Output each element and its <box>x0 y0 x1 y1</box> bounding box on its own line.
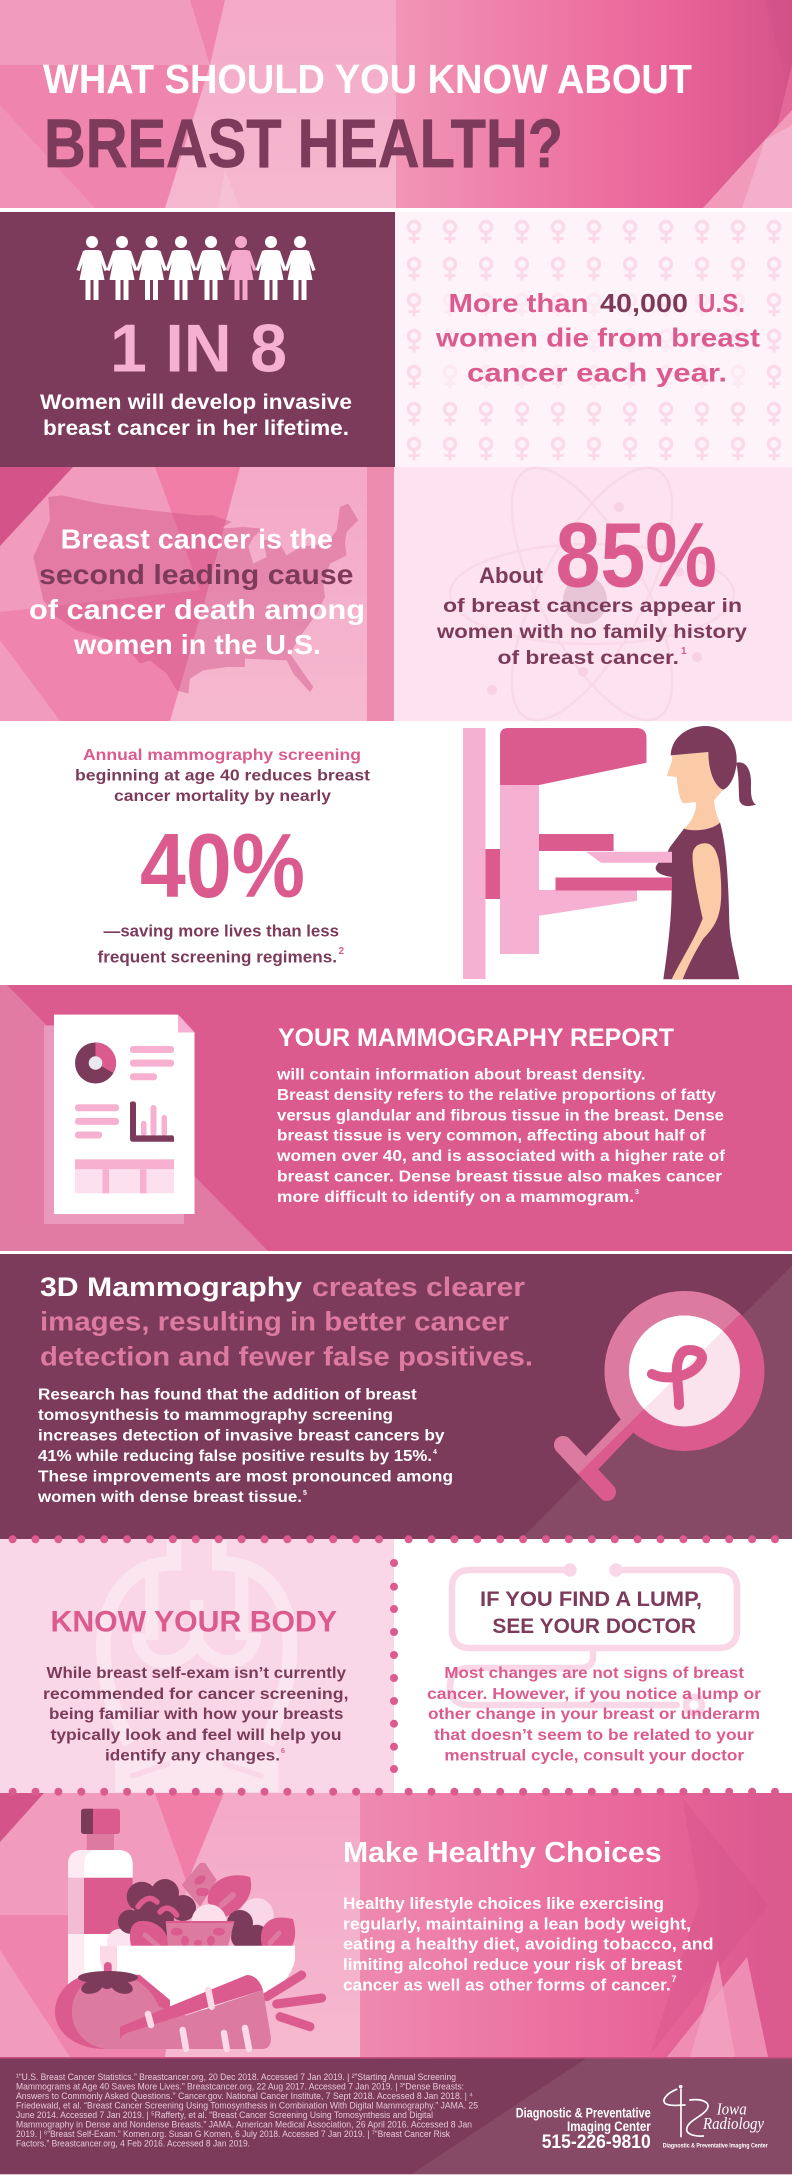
text block: that doesn’t seem to be related to your <box>434 1727 754 1744</box>
heading: Make Healthy Choices <box>343 1837 662 1869</box>
icon: ribbon <box>652 1350 702 1405</box>
panel: make healthy choices <box>0 1793 792 2057</box>
text block: menstrual cycle, consult your doctor <box>444 1748 744 1765</box>
text block <box>43 1665 348 1765</box>
text block: Healthy lifestyle choices like exercising <box>343 1894 664 1913</box>
text block: versus glandular and fibrous tissue in the breast. Dense <box>277 1107 724 1124</box>
logo: Iowa Radiology: Radiology <box>702 2114 764 2133</box>
text block: will contain information about breast density. <box>276 1066 646 1083</box>
logo: Iowa Radiology: Diagnostic & Preventative Imaging Center <box>663 2143 768 2150</box>
heading: IF YOU FIND A LUMP, <box>480 1587 702 1611</box>
text block: eating a healthy diet, avoiding tobacco, and <box>343 1935 714 1954</box>
text block: intro <box>75 747 371 805</box>
text block: While breast self-exam isn’t currently <box>46 1665 346 1682</box>
text block: 1 <box>681 646 687 657</box>
panel: 85 percent <box>394 446 792 742</box>
text block: Research has found that the addition of breast <box>38 1387 417 1404</box>
heading: SEE YOUR DOCTOR <box>492 1614 696 1638</box>
text block: being familiar with how your breasts <box>49 1706 343 1723</box>
text block: of breast cancers appear in <box>443 596 742 617</box>
illustration: woman <box>556 726 756 979</box>
text block: 40,000 <box>600 288 688 318</box>
text block: More than <box>448 288 588 318</box>
text block: Most changes are not signs of breast <box>444 1665 745 1682</box>
icon: tomato <box>55 1962 200 2049</box>
text block: references: Factors.” Breastcancer.org, 4 Feb 2016. Accessed 8 Jan 2019. <box>16 2139 250 2150</box>
text block: cancer each year. <box>467 358 727 388</box>
panel: 3D mammography <box>0 1254 792 1539</box>
icon: bowl <box>100 1946 295 2010</box>
text block: 7 <box>672 1974 677 1984</box>
text block: About <box>479 563 544 588</box>
text block: breast cancer in her lifetime. <box>43 417 349 440</box>
text block: 3 <box>635 1189 639 1196</box>
illustration: mammography machine <box>463 728 646 979</box>
text block <box>435 288 760 388</box>
panel: know your body <box>0 1539 394 1793</box>
text block: women with dense breast tissue. <box>37 1489 302 1506</box>
text block: women over 40, and is associated with a higher rate of <box>276 1148 726 1165</box>
heading: images, resulting in better cancer <box>40 1307 510 1337</box>
panel: footer <box>0 2057 792 2175</box>
decoration: dotted borders <box>9 1535 779 1796</box>
text block <box>29 524 365 660</box>
text block: outro: —saving more lives than less <box>104 923 339 941</box>
icon: broccoli <box>118 1879 269 1949</box>
text block: second leading cause <box>39 559 354 590</box>
text block: recommended for cancer screening, <box>43 1686 348 1703</box>
icon: bottle <box>68 1809 133 2000</box>
text block: Breast cancer is the <box>61 524 333 555</box>
contact block <box>516 2106 651 2153</box>
text block: typically look and feel will help you <box>50 1727 342 1744</box>
text block: tomosynthesis to mammography screening <box>38 1407 393 1424</box>
icon: atom watermark <box>450 446 734 742</box>
panel: 40,000 women <box>395 212 792 467</box>
text block: women with no family history <box>436 622 748 643</box>
text block <box>427 1665 761 1765</box>
text block: outro: frequent screening regimens. <box>98 949 337 967</box>
text block: increases detection of invasive breast cancers by <box>38 1428 445 1445</box>
icon: carrot <box>103 1975 322 2049</box>
pattern: venus symbols <box>408 221 780 460</box>
text block: limiting alcohol reduce your risk of breast <box>343 1955 682 1974</box>
text block: These improvements are most pronounced among <box>38 1468 453 1485</box>
text block: other change in your breast or underarm <box>428 1706 760 1723</box>
icon: venus symbol with ribbon <box>563 1291 764 1492</box>
icon: torso watermark <box>103 1540 290 1792</box>
text block <box>276 1066 726 1206</box>
text block: intro: Annual mammography screening <box>83 747 361 764</box>
text block: outro <box>98 923 344 967</box>
logo: Iowa Radiology: Iowa <box>716 2099 747 2118</box>
text block: references: Answers to Commonly Asked Questions.” Cancer.gov. National Cancer Institute, 7 Sept 2018. Accessed 8 Jan 2018. | ⁴ <box>16 2091 473 2102</box>
text block: of cancer death among <box>29 594 365 625</box>
panel: annual screening <box>75 726 756 979</box>
logo: Iowa Radiology <box>663 2086 768 2150</box>
text block: of breast cancer. <box>498 648 679 669</box>
statistic: 85%: 85% <box>556 505 717 607</box>
contact block: Imaging Center <box>567 2119 651 2134</box>
contact block: 515-226-9810 <box>542 2132 651 2153</box>
heading: creates clearer <box>312 1272 526 1302</box>
text block <box>37 1387 453 1506</box>
text block: outro: 2 <box>338 946 344 957</box>
text block: 5 <box>303 1490 307 1497</box>
text block: identify any changes. <box>105 1748 280 1765</box>
text block: references: 2019. | ⁶“Breast Self-Exam.” Komen.org. Susan G Komen, 6 July 2018. Accessed 7 Jan 2019. | ⁷“Breast Cancer Risk <box>16 2129 450 2140</box>
text block: women die from breast <box>435 323 760 353</box>
contact block: Diagnostic & Preventative <box>516 2106 651 2121</box>
title line 1: WHAT SHOULD YOU KNOW ABOUT <box>43 56 692 102</box>
heading: detection and fewer false positives. <box>40 1342 533 1372</box>
text block: 6 <box>281 1748 285 1755</box>
statistic: 1 in 8: 1 IN 8 <box>110 310 287 386</box>
icon: report document <box>44 1015 194 1224</box>
text block: intro: cancer mortality by nearly <box>114 788 331 805</box>
panel: 1 in 8 <box>0 212 395 467</box>
map: United States <box>33 495 358 694</box>
text block: more difficult to identify on a mammogram. <box>277 1189 634 1206</box>
icon: stethoscope speech bubble <box>450 1566 737 1713</box>
text block <box>436 563 748 669</box>
heading: KNOW YOUR BODY <box>50 1606 337 1639</box>
text block: references: Friedewald, et al. “Breast Cancer Screening Using Tomosynthesis in Combination With Digital Mammography.” JAMA. 25 <box>16 2101 478 2112</box>
text block: references <box>16 2072 478 2150</box>
text block: women in the U.S. <box>73 629 321 660</box>
text block: references: Mammograms at Age 40 Saves More Lives.” Breastcancer.org, 22 Aug 2017. Accessed 7 Jan 2019. | ³“Dense Breasts: <box>16 2082 464 2093</box>
icon: row of eight women <box>76 236 316 300</box>
panel: mammography report <box>0 985 792 1251</box>
text block <box>40 391 352 440</box>
text block: cancer as well as other forms of cancer. <box>343 1975 671 1994</box>
panel: second leading cause <box>0 467 394 721</box>
text block: Breast density refers to the relative proportions of fatty <box>277 1087 716 1104</box>
text block: references: June 2014. Accessed 7 Jan 2019. | ⁵Rafferty, et al. “Breast Cancer Screening Using Tomosynthesis and Digital <box>16 2110 433 2121</box>
title line 2: BREAST HEALTH? <box>44 105 563 182</box>
text block: cancer. However, if you notice a lump or <box>427 1686 761 1703</box>
text block <box>343 1894 714 1994</box>
panel: find a lump <box>394 1539 792 1793</box>
text block: references: ¹“U.S. Breast Cancer Statistics.” Breastcancer.org, 20 Dec 2018. Accessed 7 Jan 2019. | ²“Starting Annual Screening <box>16 2072 456 2083</box>
heading: YOUR MAMMOGRAPHY REPORT <box>278 1024 674 1052</box>
statistic: 40%: 40% <box>140 816 305 917</box>
heading <box>480 1587 702 1638</box>
panel: header <box>0 0 792 208</box>
text block: references: Mammography in Dense and Nondense Breasts.” JAMA. American Medical Association, 26 April 2016. Accessed 8 Jan <box>16 2120 472 2131</box>
text block: U.S. <box>698 288 745 318</box>
text block: Women will develop invasive <box>40 391 352 414</box>
heading: 3D Mammography <box>40 1272 302 1302</box>
text block: breast tissue is very common, affecting about half of <box>277 1128 706 1145</box>
text block: intro: beginning at age 40 reduces breast <box>75 768 371 785</box>
text block: 4 <box>433 1449 437 1456</box>
heading <box>40 1272 533 1372</box>
illustration: healthy food <box>55 1809 322 2049</box>
text block: 41% while reducing false positive results by 15%. <box>38 1448 432 1465</box>
text block: breast cancer. Dense breast tissue also makes cancer <box>277 1168 722 1185</box>
text block: regularly, maintaining a lean body weight, <box>343 1914 691 1933</box>
